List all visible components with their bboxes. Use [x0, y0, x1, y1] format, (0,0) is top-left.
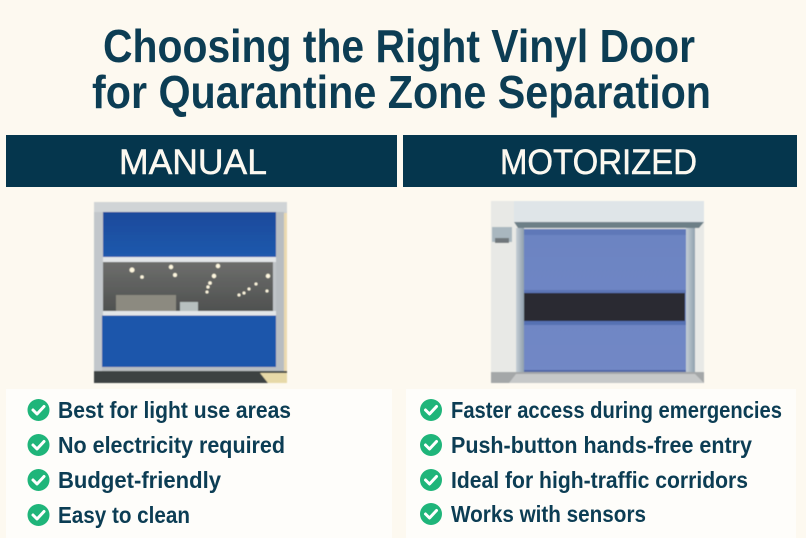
title — [92, 20, 711, 118]
header: manual: MANUAL — [119, 143, 267, 182]
title: for Quarantine Zone Separation — [92, 66, 711, 118]
list item: works with sensors: Works with sensors — [451, 501, 646, 527]
list item: push-button hands-free entry: Push-button hands-free entry — [451, 432, 752, 458]
header: motorized: MOTORIZED — [500, 143, 697, 182]
photo: motorized vinyl door — [491, 201, 704, 383]
photo: manual vinyl door — [94, 202, 287, 383]
title: Choosing the Right Vinyl Door — [103, 20, 695, 72]
panel: manual benefits — [6, 389, 392, 538]
list item: best for light use areas: Best for light use areas — [58, 397, 291, 423]
list item: budget-friendly: Budget-friendly — [58, 467, 221, 493]
list item: easy to clean: Easy to clean — [58, 502, 190, 528]
header: motorized — [403, 135, 797, 187]
header: manual — [6, 135, 397, 187]
panel: motorized benefits — [406, 389, 796, 538]
list item: ideal for high-traffic corridors: Ideal for high-traffic corridors — [451, 467, 748, 493]
list item: no electricity required: No electricity required — [58, 432, 285, 458]
